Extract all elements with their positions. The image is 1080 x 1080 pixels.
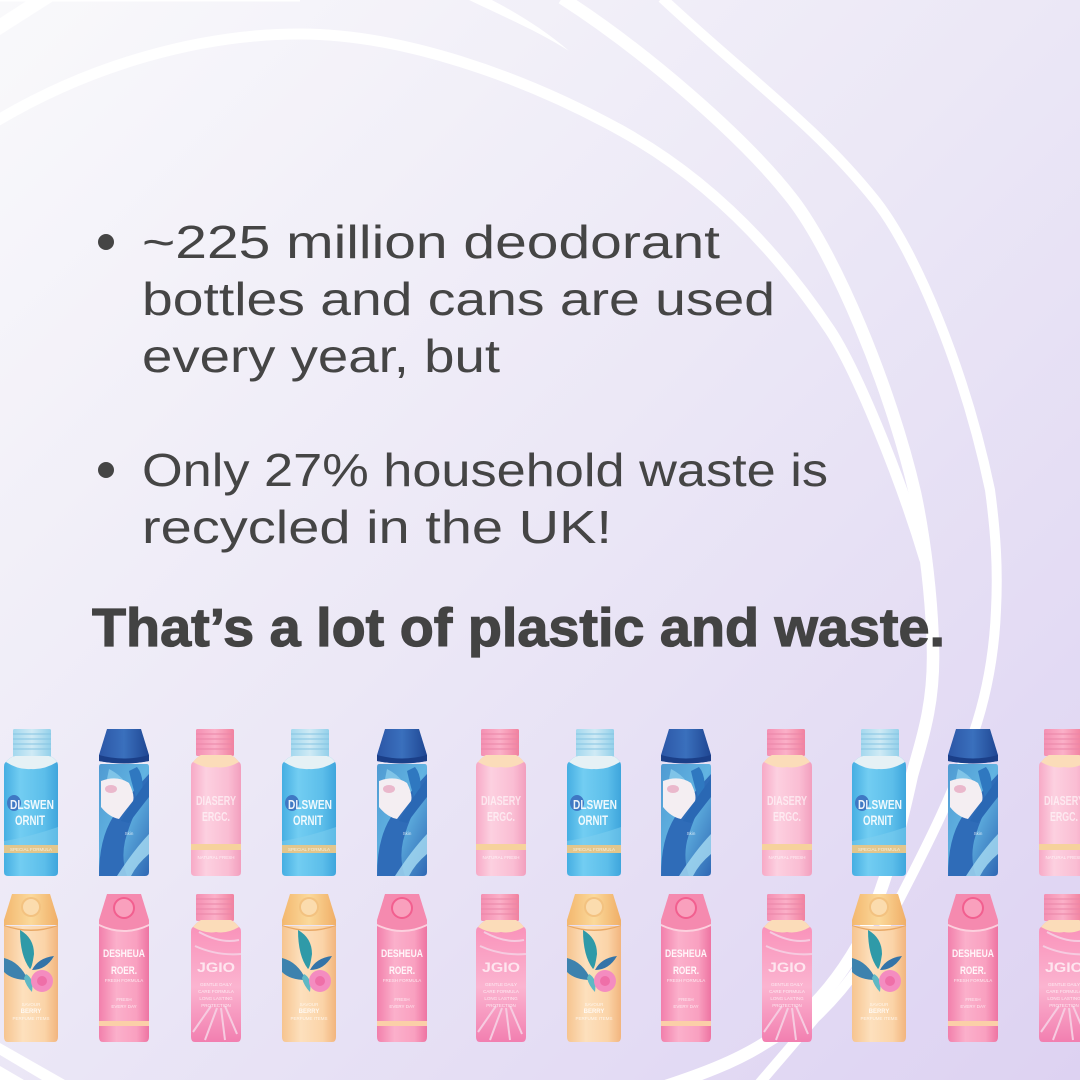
bottle: blue [567, 729, 621, 876]
bottle: light pink [191, 729, 241, 876]
bottle: light pink [762, 729, 812, 876]
bullet: household recycling rate [98, 444, 828, 553]
bottle: pink flip cap [948, 894, 998, 1042]
bottle: hot pink ribbed cap [191, 894, 241, 1042]
closing statement heading: That’s a lot of plastic and waste. [92, 598, 945, 658]
bottom row of bottles [4, 894, 1080, 1042]
bottle: navy floral [948, 729, 998, 876]
bullet: deodorant bottles used: every year, but [142, 330, 500, 382]
bottle: light pink [1039, 729, 1080, 876]
bottle: pink flip cap [99, 894, 149, 1042]
top row of bottles [4, 729, 1080, 876]
bottle: navy floral [377, 729, 427, 876]
bullet: household recycling rate: Only 27% household waste is [142, 444, 828, 496]
bullet: deodorant bottles used [98, 216, 775, 382]
bottle: peach with leaves [852, 894, 906, 1042]
bottle: pink flip cap [661, 894, 711, 1042]
bottle: peach with leaves [567, 894, 621, 1042]
bottle: hot pink ribbed cap [1039, 894, 1080, 1042]
bottle: light pink [476, 729, 526, 876]
bottle: blue [282, 729, 336, 876]
bottle: hot pink ribbed cap [762, 894, 812, 1042]
bottle: blue [852, 729, 906, 876]
bottle: peach with leaves [282, 894, 336, 1042]
bottle: peach with leaves [4, 894, 58, 1042]
bullet: deodorant bottles used: bottles and cans are used [142, 273, 775, 325]
bottle: navy floral [99, 729, 149, 876]
bottle: navy floral [661, 729, 711, 876]
bottle: pink flip cap [377, 894, 427, 1042]
bullet: deodorant bottles used: ~225 million deodorant [142, 216, 720, 268]
bottle: hot pink ribbed cap [476, 894, 526, 1042]
bullet: household recycling rate: recycled in the UK! [142, 501, 612, 553]
bottle: blue [4, 729, 58, 876]
